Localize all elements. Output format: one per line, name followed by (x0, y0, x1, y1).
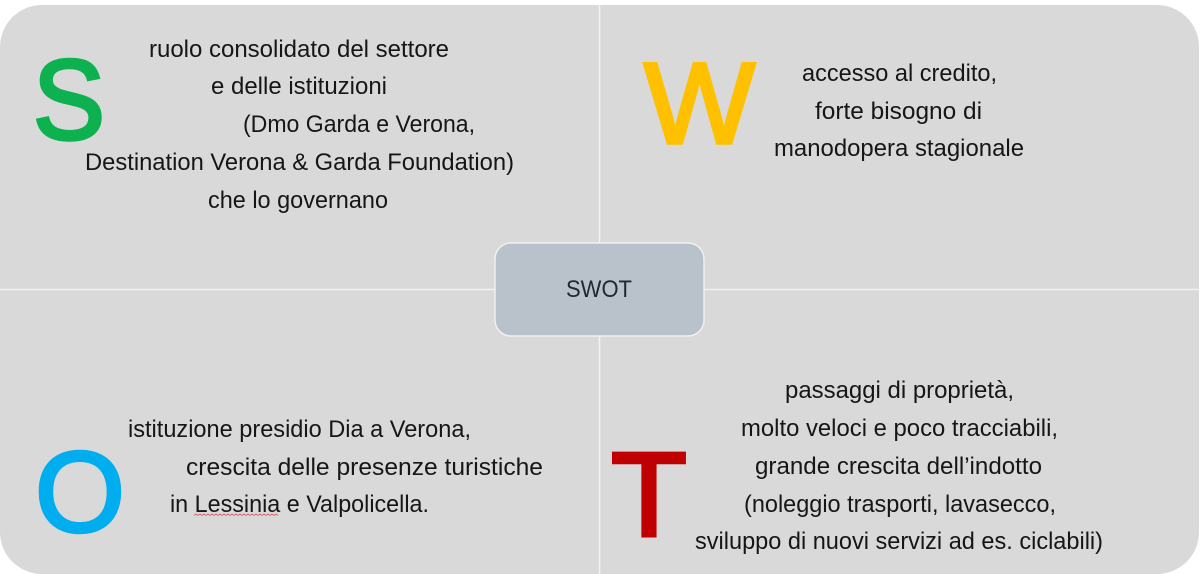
weaknesses text: accesso al credito, (802, 60, 997, 87)
strengths text: ruolo consolidato del settore (149, 36, 449, 63)
threats text: (noleggio trasporti, lavasecco, (744, 491, 1056, 518)
panel: strengths (33, 36, 514, 214)
strengths text (85, 36, 514, 214)
letter T: T (611, 428, 687, 562)
opportunities text (128, 416, 543, 518)
opportunities text: crescita delle presenze turistiche (186, 454, 543, 481)
spelling underline (194, 514, 278, 516)
weaknesses text: forte bisogno di (815, 98, 982, 125)
strengths text: e delle istituzioni (211, 73, 387, 100)
letter W: W (644, 40, 755, 168)
opportunities text: in Lessinia e Valpolicella. (170, 491, 429, 518)
letter O: O (35, 430, 125, 556)
threats text: passaggi di proprietà, (785, 377, 1014, 404)
panel: weaknesses (644, 40, 1024, 168)
threats text (695, 377, 1103, 555)
panel: opportunities (35, 416, 543, 556)
panel: threats (611, 377, 1103, 562)
center box: SWOT: SWOT (566, 276, 632, 303)
strengths text: che lo governano (208, 187, 388, 214)
strengths text: (Dmo Garda e Verona, (243, 111, 475, 138)
threats text: grande crescita dell’indotto (755, 453, 1042, 480)
threats text: molto veloci e poco tracciabili, (741, 415, 1058, 442)
strengths text: Destination Verona & Garda Foundation) (85, 149, 514, 176)
center box: SWOT (495, 243, 704, 336)
weaknesses text (774, 60, 1024, 162)
threats text: sviluppo di nuovi servizi ad es. ciclabili) (695, 528, 1103, 555)
opportunities text: istituzione presidio Dia a Verona, (128, 416, 471, 443)
weaknesses text: manodopera stagionale (774, 135, 1024, 162)
letter S: S (33, 37, 105, 163)
